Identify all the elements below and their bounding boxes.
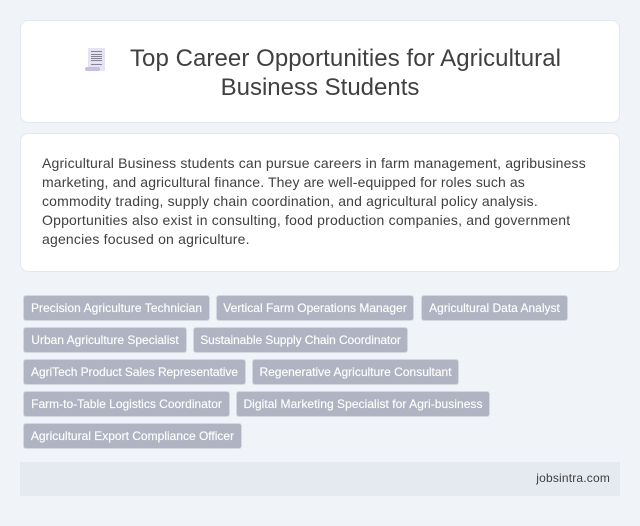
tag (193, 327, 408, 353)
tag (23, 359, 246, 385)
description text: Opportunities also exist in consulting, food production companies, and government (42, 212, 570, 228)
tag (421, 295, 568, 321)
title: Business Students (221, 74, 419, 101)
description text: agencies focused on agriculture. (42, 231, 250, 247)
tag: Farm-to-Table Logistics Coordinator (31, 397, 222, 411)
title (130, 45, 561, 101)
footer text: jobsintra.com (536, 471, 610, 485)
tag (23, 327, 187, 353)
tag (23, 391, 230, 417)
tag: Vertical Farm Operations Manager (223, 301, 407, 315)
description text: marketing, and agricultural finance. They are well-equipped for roles such as (42, 174, 525, 190)
tag: Regenerative Agriculture Consultant (259, 365, 452, 379)
tag: Urban Agriculture Specialist (31, 333, 179, 347)
tag: Precision Agriculture Technician (31, 301, 202, 315)
tag: AgriTech Product Sales Representative (31, 365, 238, 379)
tag: Digital Marketing Specialist for Agri-business (243, 397, 483, 411)
tag (216, 295, 414, 321)
description text: commodity trading, supply chain coordination, and agricultural policy analysis. (42, 193, 538, 209)
description text (42, 155, 586, 247)
tag list (23, 295, 568, 449)
header panel (20, 20, 620, 123)
tag (23, 423, 242, 449)
title: Top Career Opportunities for Agricultural (130, 45, 561, 72)
tag: Agricultural Export Compliance Officer (31, 429, 234, 443)
tag (23, 295, 210, 321)
tag: Agricultural Data Analyst (429, 301, 560, 315)
footer bar (20, 462, 620, 496)
description text: Agricultural Business students can pursue careers in farm management, agribusiness (42, 155, 586, 171)
icon: document scroll (85, 48, 105, 71)
tag (236, 391, 490, 417)
tag: Sustainable Supply Chain Coordinator (200, 333, 401, 347)
description panel (20, 133, 620, 272)
tag (252, 359, 459, 385)
